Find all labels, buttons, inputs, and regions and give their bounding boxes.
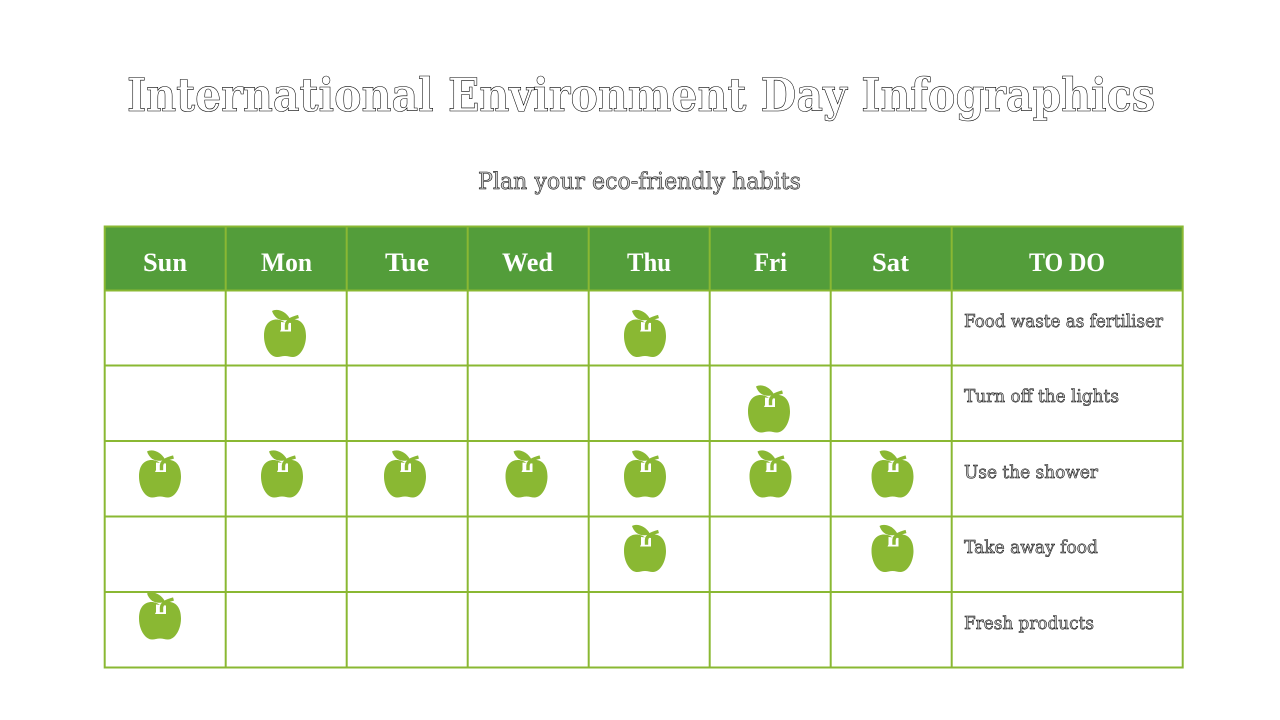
icons: row 1 Food waste as fertiliser bbox=[264, 310, 666, 357]
to-do list labels: Take away food bbox=[964, 537, 1098, 558]
to-do list labels: Fresh products bbox=[964, 613, 1094, 634]
header labels: Sun bbox=[143, 248, 188, 277]
icon: row 5 Fresh products bbox=[139, 592, 181, 640]
table: weekly habits bbox=[105, 226, 1183, 668]
to-do list labels bbox=[964, 311, 1163, 634]
to-do list labels: Food waste as fertiliser bbox=[964, 311, 1163, 332]
header labels bbox=[143, 248, 1105, 277]
title: International Environment Day Infographics bbox=[127, 68, 1155, 122]
subtitle: Plan your eco-friendly habits bbox=[478, 169, 801, 195]
header labels: Wed bbox=[502, 248, 554, 277]
header labels: Tue bbox=[385, 248, 429, 277]
icons: row 3 Use the shower bbox=[139, 450, 914, 498]
header labels: Mon bbox=[261, 248, 313, 277]
header labels: Thu bbox=[627, 248, 671, 277]
table header band bbox=[105, 226, 1183, 290]
icon: row 2 Turn off the lights bbox=[748, 385, 790, 432]
icons: row 4 Take away food bbox=[624, 525, 914, 572]
header labels: Sat bbox=[872, 248, 909, 277]
to-do list labels: Use the shower bbox=[964, 462, 1098, 483]
header labels: Fri bbox=[754, 248, 787, 277]
header labels: TO DO bbox=[1029, 248, 1105, 277]
to-do list labels: Turn off the lights bbox=[964, 386, 1119, 407]
